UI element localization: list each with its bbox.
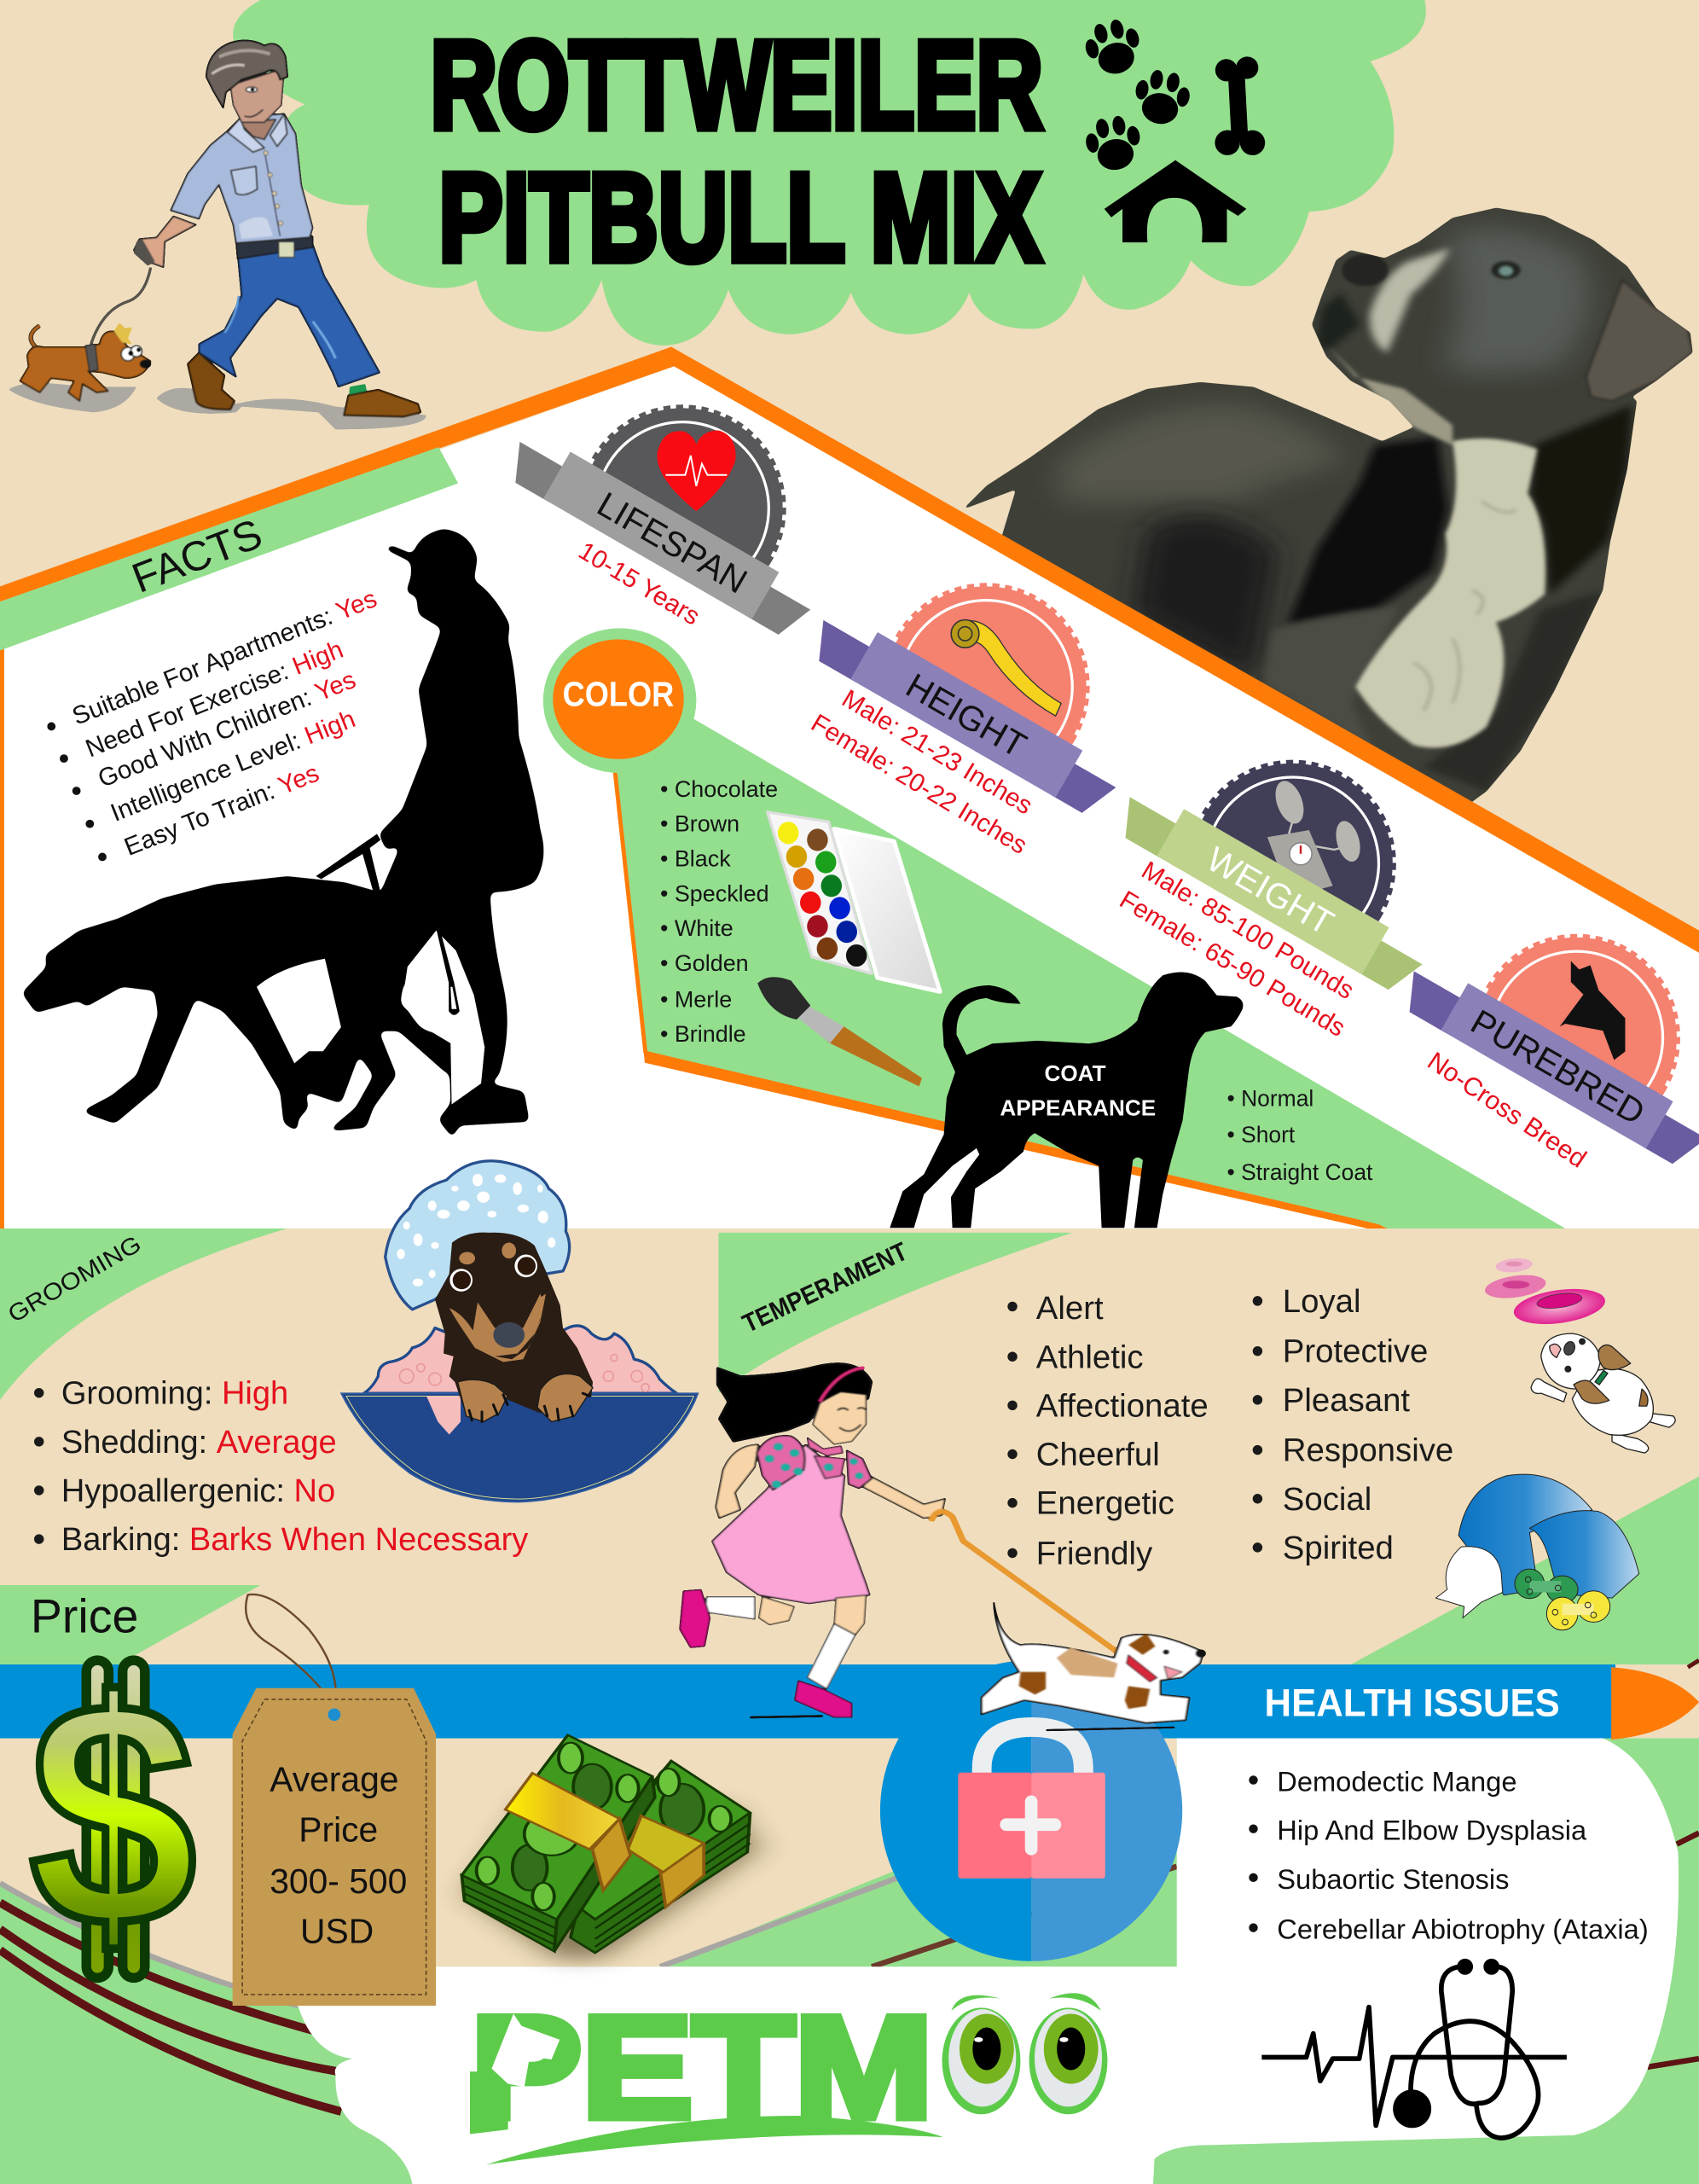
health list: Subaortic Stenosis (1277, 1863, 1509, 1895)
grooming list (34, 1376, 528, 1558)
coat label: APPEARANCE (1000, 1095, 1156, 1121)
illustration: dachshund in bath (341, 1161, 698, 1502)
leash loop (436, 928, 460, 1015)
coat list: • Short (1226, 1122, 1296, 1147)
color list: • Black (660, 846, 731, 872)
bottom green (0, 1739, 1699, 2184)
price corner (0, 1585, 260, 1664)
illustration: frisbee and puppies (1435, 1257, 1675, 1630)
panel: white diamond with orange border (0, 347, 1699, 1228)
temperament list column 1: Friendly (1036, 1535, 1153, 1571)
temperament list column 1: Affectionate (1036, 1387, 1209, 1424)
temperament list column 1 (1007, 1290, 1209, 1571)
color list: • Merle (660, 986, 732, 1012)
dog (435, 1233, 593, 1416)
color list: • Brindle (660, 1021, 746, 1047)
stripes: dark red lines (0, 1660, 1699, 2111)
green band (614, 718, 1565, 1228)
dog (981, 1602, 1203, 1730)
badge: height: HEIGHT (900, 665, 1033, 765)
leg gap (402, 931, 484, 1105)
icon: stethoscope with pulse (1261, 1961, 1567, 2138)
silhouette: leash (316, 834, 380, 892)
lifespan value: 10-15 Years (573, 537, 705, 631)
panel: grooming corner (0, 1228, 287, 1400)
temperament list column 1: Energetic (1036, 1485, 1174, 1522)
color circle (543, 628, 696, 773)
health list: Hip And Elbow Dysplasia (1277, 1815, 1587, 1846)
tag text: Price (299, 1809, 378, 1849)
title: PITBULL MIX (438, 148, 1041, 288)
illustration: man walking dog (9, 40, 426, 429)
panel: white logo and health area (298, 1739, 1679, 2184)
coat label: COAT (1044, 1060, 1106, 1086)
shower cap (386, 1161, 570, 1310)
tag text: 300- 500 (270, 1862, 407, 1901)
temperament list column 1: Alert (1036, 1290, 1104, 1327)
icon: paws bone and dog house (1081, 15, 1266, 242)
facts heading band (0, 447, 458, 650)
height values: Female: 20-22 Inches (806, 709, 1032, 860)
temperament list column 2: Loyal (1283, 1283, 1361, 1320)
logo letters: PETM (471, 1986, 933, 2148)
grooming list: Grooming: High (61, 1376, 288, 1412)
illustration: girl running with dog (680, 1363, 1206, 1730)
logo swoosh (486, 2116, 943, 2164)
icon: heart with pulse (657, 430, 736, 511)
green corner right (1351, 1477, 1699, 1664)
badge: purebred (1409, 933, 1699, 1164)
color list: • Chocolate (660, 776, 778, 802)
panel: facts (0, 447, 458, 862)
icon: frisbees (1483, 1257, 1608, 1329)
logo: petmoo (470, 1986, 1107, 2164)
health list (1249, 1766, 1649, 1945)
heading: price: Price (31, 1589, 138, 1642)
icon: scales (1267, 777, 1364, 897)
temperament list column 2: Spirited (1283, 1530, 1394, 1566)
temperament list column 2 (1253, 1283, 1453, 1566)
purebred value: No-Cross Breed (1423, 1047, 1591, 1174)
color circle: COLOR (563, 675, 674, 714)
heading: facts: FACTS (126, 511, 269, 602)
tag string (246, 1594, 341, 1716)
temperament list column 2: Social (1283, 1481, 1371, 1518)
lower beige section (0, 1228, 1699, 1739)
icon: jumping puppy (1531, 1333, 1675, 1453)
silhouette: woman walking dog (21, 529, 544, 1138)
color list: • Speckled (660, 880, 769, 906)
icon: tunnel and toys (1435, 1474, 1639, 1630)
title (431, 15, 1043, 288)
icon: medical lock circle (880, 1660, 1182, 1961)
badge: lifespan (515, 404, 810, 635)
stripe: gray edges (0, 1878, 898, 2006)
title: ROTTWEILER (431, 15, 1043, 155)
badge: height (819, 583, 1116, 813)
weight values: Male: 85-100 Pounds (1137, 857, 1359, 1005)
girl (680, 1363, 945, 1717)
paws (458, 1380, 507, 1422)
coat label (1000, 1060, 1156, 1121)
panel: color and coat (543, 628, 1565, 1228)
facts list: Good With Children: Yes (94, 665, 360, 793)
coat list: • Straight Coat (1226, 1159, 1373, 1185)
weight values: Female: 65-90 Pounds (1115, 886, 1350, 1043)
icon: dog house (1105, 160, 1246, 242)
banner: health issues band (0, 1664, 1699, 1740)
health list: Demodectic Mange (1277, 1766, 1516, 1798)
tag text: Average (270, 1760, 398, 1799)
badge: weight (1126, 759, 1423, 990)
grooming list: Hypoallergenic: No (61, 1473, 335, 1509)
facts list: Suitable For Apartments: Yes (68, 584, 380, 731)
color list: • Brown (660, 811, 739, 837)
belly gap (257, 959, 341, 1063)
leash (931, 1512, 1122, 1655)
tag text: USD (300, 1912, 374, 1951)
facts list: Intelligence Level: High (107, 705, 359, 828)
grooming list: Barking: Barks When Necessary (61, 1522, 528, 1558)
foam (364, 1326, 676, 1393)
facts list: Need For Exercise: High (82, 636, 347, 763)
icon: measuring tape (951, 620, 1061, 716)
height values: Male: 21-23 Inches (837, 684, 1037, 820)
orange edge (643, 1050, 1387, 1228)
grooming list: Shedding: Average (61, 1425, 337, 1461)
icon: paw 2 (1131, 67, 1193, 128)
color list: • White (660, 915, 734, 941)
icon: bone (1210, 55, 1266, 157)
temperament list column 1: Athletic (1036, 1339, 1144, 1375)
title cloud (233, 0, 1426, 346)
banner: health issues band: HEALTH ISSUES (1265, 1681, 1560, 1724)
heading: temperament: TEMPERAMENT (739, 1237, 913, 1339)
color list (660, 776, 778, 1047)
icon: paint palette (768, 812, 940, 991)
temperament list column 2: Protective (1283, 1333, 1428, 1370)
temperament list column 2: Responsive (1283, 1432, 1453, 1469)
tag text (270, 1760, 407, 1951)
badge: purebred: PUREBRED (1464, 1002, 1651, 1132)
logo eyes (470, 1993, 1107, 2164)
icon: dog silhouette (1560, 961, 1625, 1060)
temperament list column 1: Cheerful (1036, 1437, 1160, 1473)
icon: paw 3 (1082, 113, 1145, 174)
badge: weight: WEIGHT (1200, 839, 1340, 943)
icon: stack of money (461, 1735, 758, 1959)
facts list (47, 584, 380, 862)
heading: grooming: GROOMING (3, 1230, 146, 1327)
icon: paint brush (757, 977, 922, 1086)
price tag (233, 1594, 436, 2006)
badge: lifespan: LIFESPAN (591, 485, 754, 601)
coat list: • Normal (1226, 1085, 1313, 1111)
health list: Cerebellar Abiotrophy (Ataxia) (1277, 1914, 1649, 1945)
photo: rottweiler pitbull dog (962, 208, 1693, 805)
silhouette: coat dog (890, 972, 1243, 1228)
panel: temperament corner (719, 1233, 1072, 1393)
bowl (341, 1393, 698, 1502)
beige area under band (0, 1739, 1177, 2006)
icon: dollar sign: $ (29, 1635, 196, 1994)
facts list: Easy To Train: Yes (120, 759, 323, 862)
temperament list column 2: Pleasant (1283, 1382, 1410, 1419)
coat list (1226, 1085, 1373, 1185)
silhouette: woman and dog bodies (21, 529, 544, 1138)
icon: paw 1 (1081, 15, 1146, 80)
color list: • Golden (660, 950, 749, 976)
